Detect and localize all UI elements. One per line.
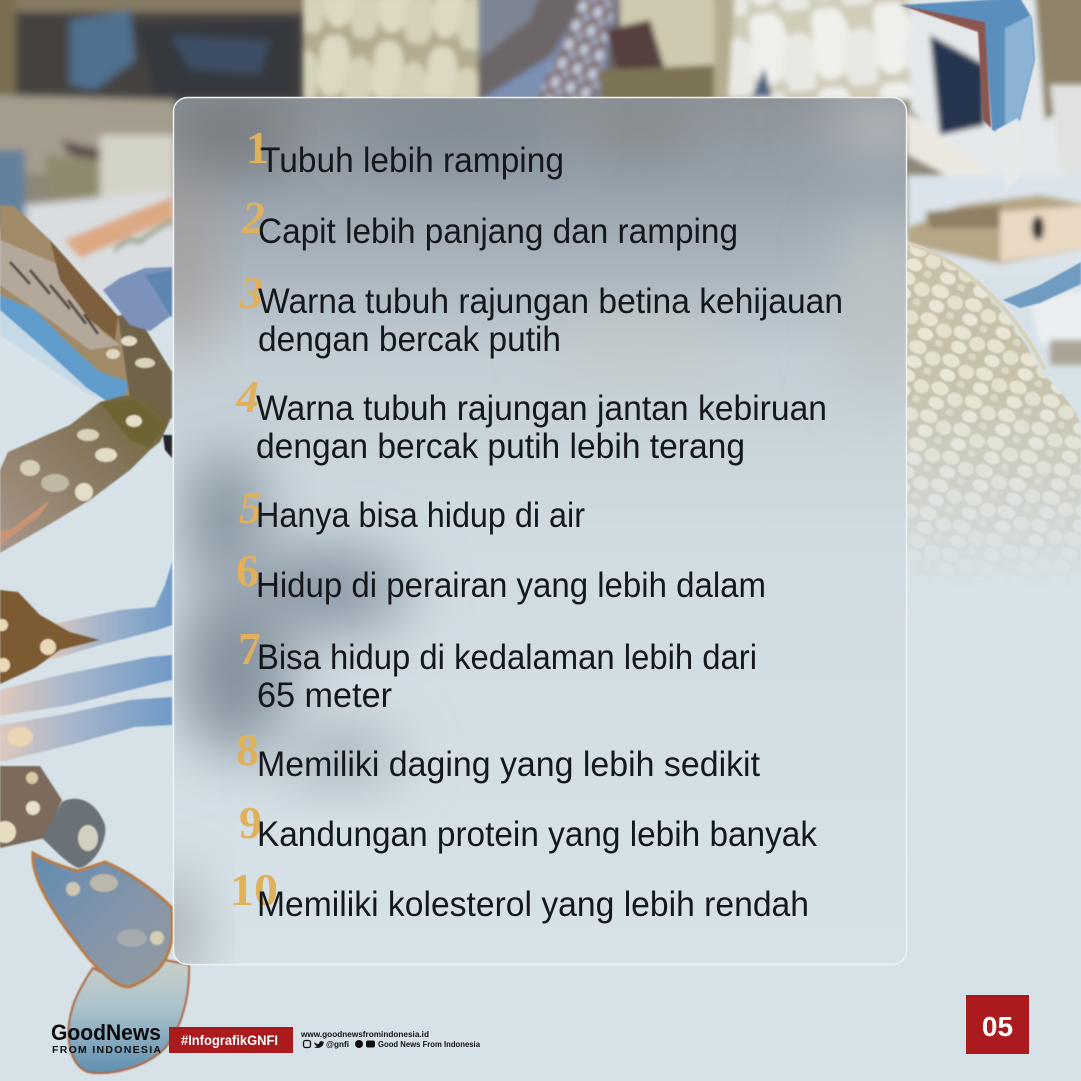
crab legs and body left [0,562,189,1073]
page number badge [966,995,1029,1054]
hashtag badge [169,1027,293,1053]
icon: twitter [314,1041,324,1048]
icon: facebook [355,1040,363,1048]
list item 3: dengan bercak putih [258,320,561,359]
blue claw tip top right [900,0,1035,192]
list item 7 [238,623,757,715]
logo: GoodNews from Indonesia: FROM INDONESIA [52,1044,161,1056]
icon: instagram [304,1040,310,1048]
list item 6: 6 [236,545,259,596]
list item 7: Bisa hidup di kedalaman lebih dari [257,638,757,677]
crab shell right [907,241,1081,566]
website and social handles [300,1030,481,1049]
blue claw right [1003,262,1081,308]
handle text: @gnfi [326,1040,349,1049]
list item 8: Memiliki daging yang lebih sedikit [257,745,760,784]
website and social handles: www.goodnewsfromindonesia.id [300,1030,429,1039]
list item 2 [241,192,738,251]
list item 3: 3 [239,267,263,318]
list item 3 [239,267,843,359]
list item 1: Tubuh lebih ramping [260,141,564,180]
list item 7: 65 meter [257,676,392,715]
list item 10 [230,864,809,924]
list item 7: 7 [238,623,261,674]
list item 4 [235,371,827,466]
list item 5: Hanya bisa hidup di air [256,496,585,535]
list item 9: 9 [239,797,262,848]
list item 2: Capit lebih panjang dan ramping [258,212,738,251]
list item 9: Kandungan protein yang lebih banyak [257,815,817,854]
list item 5: 5 [239,482,262,533]
list item 6 [236,545,766,605]
hashtag badge: #InfografikGNFI [181,1033,278,1048]
list item 2: 2 [241,192,265,243]
background photo: crabs along the top [0,0,1081,365]
list item 10: Memiliki kolesterol yang lebih rendah [257,885,809,924]
logo: GoodNews from Indonesia [51,1020,161,1056]
list item 8 [236,724,760,784]
channel name text: Good News From Indonesia [378,1040,481,1049]
list item 6: Hidup di perairan yang lebih dalam [256,566,766,605]
list item 9 [239,797,817,854]
list item 4: 4 [235,371,259,422]
icon: youtube [366,1040,375,1048]
list item 1: 1 [246,122,269,173]
list item 4: dengan bercak putih lebih terang [256,427,745,466]
list item 1 [246,122,564,180]
crab claw left [0,205,172,553]
list item 3: Warna tubuh rajungan betina kehijauan [258,282,843,321]
list item 10: 10 [230,864,278,915]
top photo texture [65,0,1081,365]
list item 4: Warna tubuh rajungan jantan kebiruan [256,389,827,428]
list item 5 [239,482,585,535]
page number badge: 05 [982,1011,1013,1042]
list item 8: 8 [236,724,259,775]
logo: GoodNews from Indonesia: GoodNews [51,1020,161,1045]
glass panel [145,90,930,990]
